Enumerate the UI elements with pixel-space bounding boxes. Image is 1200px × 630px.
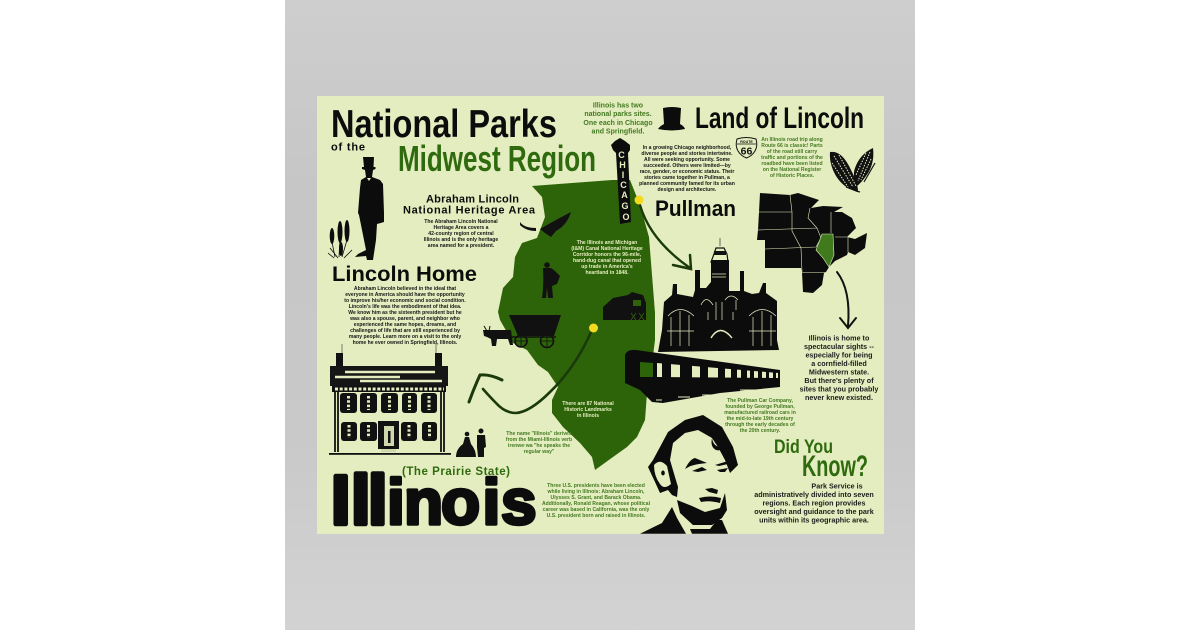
text: I and M canal: (I&M) Canal National Heritage <box>571 246 643 252</box>
text: 87 landmarks: in Illinois <box>577 413 599 419</box>
heading: Pullman: Pullman <box>655 196 736 221</box>
text: three presidents: Ulysses S. Grant, and Barack Obama. <box>551 495 642 501</box>
heading: Abraham Lincoln National Heritage Area: Abraham Lincoln <box>426 194 519 206</box>
heading: Land of Lincoln: Land of Lincoln <box>695 102 864 135</box>
text: spectacular sights: Midwestern state. <box>809 368 869 376</box>
text: origin of the name: from the Miami-Illinois verb <box>506 437 572 443</box>
text: Lincoln Home: experienced the same hopes, dreams, and <box>354 322 456 328</box>
text: route 66 road trip <box>761 137 823 179</box>
text: Pullman neighborhood: In a growing Chicago neighborhood, <box>643 145 732 151</box>
text: heritage area: The Abraham Lincoln National <box>424 219 498 225</box>
text: three presidents: while living in Illinois: Abraham Lincoln, <box>547 489 645 495</box>
text: Pullman neighborhood: planned community famed for its urban <box>639 181 735 187</box>
icon: standing Lincoln <box>355 157 384 260</box>
poster panel <box>317 96 884 534</box>
text: Pullman Car Company: through the early decades of <box>725 422 795 428</box>
heading: The Prairie State: (The Prairie State) <box>402 466 510 478</box>
heading: of the: of the <box>331 142 365 154</box>
icon: Lincoln Home house <box>329 344 451 455</box>
icon: route 66 shield <box>736 138 757 158</box>
text: I and M canal: up trade in America's <box>581 264 633 270</box>
text: route 66 road trip: of Historic Places. <box>770 173 815 179</box>
text: spectacular sights: sites that you probably <box>800 384 878 394</box>
text: Pullman Car Company: manufactured railroad cars in <box>724 410 796 416</box>
text: Park Service regions <box>754 482 874 524</box>
icon: Chicago theatre sign: C <box>620 180 627 190</box>
text: 87 landmarks: Historic Landmarks <box>564 407 612 413</box>
text: Park Service regions: regions. Each region provides <box>762 498 866 508</box>
text: two national parks sites: national parks sites. <box>584 111 652 118</box>
arrow: Chicago to Pullman <box>640 205 691 269</box>
heading: Abraham Lincoln National Heritage Area: National Heritage Area <box>403 204 536 216</box>
text: two national parks sites: One each in Chicago <box>583 120 653 127</box>
text: Pullman neighborhood: design and architecture. <box>658 187 717 193</box>
icon: route 66 shield: ROUTE <box>740 140 753 144</box>
text: heritage area: Illinois and is the only heritage <box>424 237 498 243</box>
text: route 66 road trip: Route 66 is classic! Parts <box>761 143 823 149</box>
text: three presidents: career was based in California, was the only <box>543 507 650 513</box>
text: Pullman neighborhood: diverse people and stories intertwine. <box>641 151 733 157</box>
text: Pullman neighborhood: stories came together in Pullman, a <box>644 175 730 181</box>
icon: reeds <box>328 220 352 258</box>
icon: route 66 shield: 66 <box>741 146 752 158</box>
icon: Midwest states map <box>757 193 867 293</box>
text: heritage area <box>424 219 498 249</box>
text: Lincoln Home: Abraham Lincoln believed in the ideal that <box>354 286 456 292</box>
text: spectacular sights: especially for being <box>805 350 873 360</box>
icon: Pullman building <box>658 238 779 352</box>
text: Lincoln Home: many people. Learn more on a visit to the only <box>349 334 461 340</box>
icon: hiker <box>542 262 560 298</box>
heading: Illinois: Ill <box>331 461 387 539</box>
text: Pullman Car Company <box>724 398 796 434</box>
text: Pullman Car Company: The Pullman Car Company, <box>727 398 794 404</box>
text: spectacular sights: never knew existed. <box>805 393 873 402</box>
heading: Illinois: inois <box>387 466 537 538</box>
text: two national parks sites: Illinois has two <box>593 102 643 110</box>
text: Pullman Car Company: founded by George Pullman, <box>725 404 795 410</box>
icon: Lincoln portrait <box>640 415 738 534</box>
icon: Chicago theatre sign: A <box>621 190 628 200</box>
icon: Pullman train car <box>625 350 780 403</box>
marker: Chicago yellow dot <box>634 196 644 204</box>
heading: Lincoln Home: Lincoln Home <box>332 263 477 286</box>
text: origin of the name: regular way" <box>524 449 555 455</box>
text: route 66 road trip: traffic and portions of the <box>761 155 823 161</box>
text: 87 landmarks <box>562 401 614 419</box>
icon: Chicago theatre sign <box>611 138 631 224</box>
text: spectacular sights <box>800 334 878 402</box>
icon: barn <box>603 292 646 320</box>
text: Lincoln Home: home he ever owned in Springfield, Illinois. <box>353 340 458 346</box>
text: heritage area: area named for a president. <box>428 243 495 249</box>
text: Pullman Car Company: the 20th century. <box>740 428 781 434</box>
wall background <box>285 0 915 630</box>
icon: Victorian couple <box>456 428 486 457</box>
text: I and M canal: The Illinois and Michigan <box>577 240 637 246</box>
heading: Know?: Know? <box>802 450 868 483</box>
text: Park Service regions: units within its geographic area. <box>759 516 869 524</box>
text: spectacular sights: Illinois is home to <box>809 334 870 342</box>
icon: covered wagon and ox <box>483 315 561 348</box>
text: I and M canal: heartland in 1848. <box>585 270 629 276</box>
text: I and M canal: Corridor honors the 96-mile, <box>573 252 642 258</box>
text: Pullman Car Company: the mid-to-late 19th century <box>727 416 794 422</box>
text: heritage area: 42-county region of central <box>428 231 494 237</box>
text: Park Service regions: Park Service is <box>811 482 863 490</box>
text: heritage area: Heritage Area covers a <box>433 225 489 231</box>
text: origin of the name: The name "Illinois" derives <box>506 431 572 437</box>
arrow: map to sights text <box>837 272 856 328</box>
heading: National Parks: National Parks <box>331 103 557 146</box>
text: Lincoln Home: We know him as the sixteenth president but he <box>348 310 462 316</box>
text: spectacular sights: a cornfield-filled <box>811 359 867 368</box>
text: Park Service regions: administratively divided into seven <box>754 490 874 499</box>
heading: Midwest Region: Midwest Region <box>398 138 596 179</box>
text: Park Service regions: oversight and guidance to the park <box>754 507 874 516</box>
text: two national parks sites: and Springfield. <box>592 128 644 136</box>
heading: Abraham Lincoln National Heritage Area <box>403 194 536 216</box>
text: 87 landmarks: There are 87 National <box>562 401 614 407</box>
text: spectacular sights: But there's plenty of <box>804 376 874 385</box>
text: Lincoln Home: Lincoln's life was the embodiment of that idea. <box>349 304 462 310</box>
icon: eagle <box>520 212 571 237</box>
text: three presidents: U.S. president born and raised in Illinois. <box>547 513 646 519</box>
text: I and M canal <box>571 240 643 276</box>
icon: Chicago theatre sign: H <box>619 160 626 170</box>
text: spectacular sights: spectacular sights -- <box>804 342 875 351</box>
text: Pullman neighborhood: race, gender, or economic status. Their <box>640 169 734 175</box>
text: two national parks sites <box>583 102 653 136</box>
text: Pullman neighborhood: succeeded. Others were limited—by <box>643 163 731 169</box>
text: origin of the name <box>506 431 572 455</box>
text: route 66 road trip: An Illinois road trip along <box>761 137 823 143</box>
text: Lincoln Home: to improve his/her economic and social condition. <box>344 298 466 304</box>
text: three presidents: Three U.S. presidents have been elected <box>547 483 645 489</box>
text: three presidents: Additionally, Ronald Reagan, whose political <box>542 501 651 507</box>
text: Lincoln Home: challenges of life that are still experienced by <box>350 328 460 334</box>
Illinois map shape <box>498 180 655 470</box>
marker: Springfield yellow dot <box>589 324 598 332</box>
text: I and M canal: hand-dug canal that opened <box>573 258 641 264</box>
icon: Chicago theatre sign: G <box>621 201 629 211</box>
arrow: Landmarks toward Lincoln Home <box>469 332 591 413</box>
icon: top hat <box>658 107 685 130</box>
heading: Did You: Did You <box>774 437 833 458</box>
text: three presidents <box>542 483 651 519</box>
text: Lincoln Home: was also a spouse, parent, and neighbor who <box>349 316 460 322</box>
text: route 66 road trip: of the road still carry <box>767 149 817 155</box>
text: Lincoln Home: everyone in America should have the opportunity <box>345 292 465 298</box>
text: Pullman neighborhood: All were seeking opportunity. Some <box>644 157 730 163</box>
icon: Chicago theatre sign: I <box>622 170 624 180</box>
text: route 66 road trip: roadbed have been listed <box>761 161 823 167</box>
icon: corn <box>830 148 875 192</box>
icon: Chicago theatre sign: C <box>618 150 625 160</box>
text: route 66 road trip: on the National Register <box>763 167 821 173</box>
text: origin of the name: irenwe·wa "he speaks the <box>508 443 570 449</box>
icon: Chicago theatre sign: O <box>622 212 630 222</box>
text: Lincoln Home <box>344 286 466 346</box>
text: Pullman neighborhood <box>639 145 735 193</box>
